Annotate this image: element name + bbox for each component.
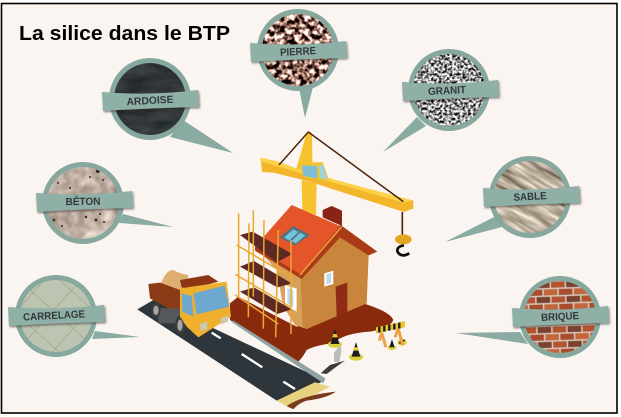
bubble: beton: [36, 162, 173, 244]
bubble: pierre: [250, 9, 347, 118]
bubble: pierre: PIERRE: [280, 45, 316, 59]
illustration: construction site: [137, 132, 413, 409]
scaffolding: [235, 210, 292, 337]
bubble: sable: [445, 156, 582, 242]
road: [137, 300, 336, 409]
crane: [261, 132, 413, 255]
jackhammer: [321, 345, 345, 374]
bubble: carrelage: CARRELAGE: [23, 308, 85, 324]
bubble: carrelage: [8, 275, 140, 357]
bubble: beton: BÉTON: [65, 195, 101, 208]
bubble: granit: [383, 49, 499, 152]
bubble: brique: [456, 276, 609, 358]
bubble: granit: GRANIT: [428, 84, 467, 98]
bubble: brique: BRIQUE: [541, 310, 579, 324]
bubble: ardoise: [102, 58, 233, 153]
title: La silice dans le BTP: [19, 23, 230, 45]
bubble: ardoise: ARDOISE: [126, 94, 174, 108]
house: [255, 205, 377, 329]
truck: [148, 270, 231, 337]
bubble: sable: SABLE: [513, 190, 547, 204]
ground: [230, 297, 393, 362]
cones: [328, 329, 407, 361]
barrier: [376, 321, 405, 347]
